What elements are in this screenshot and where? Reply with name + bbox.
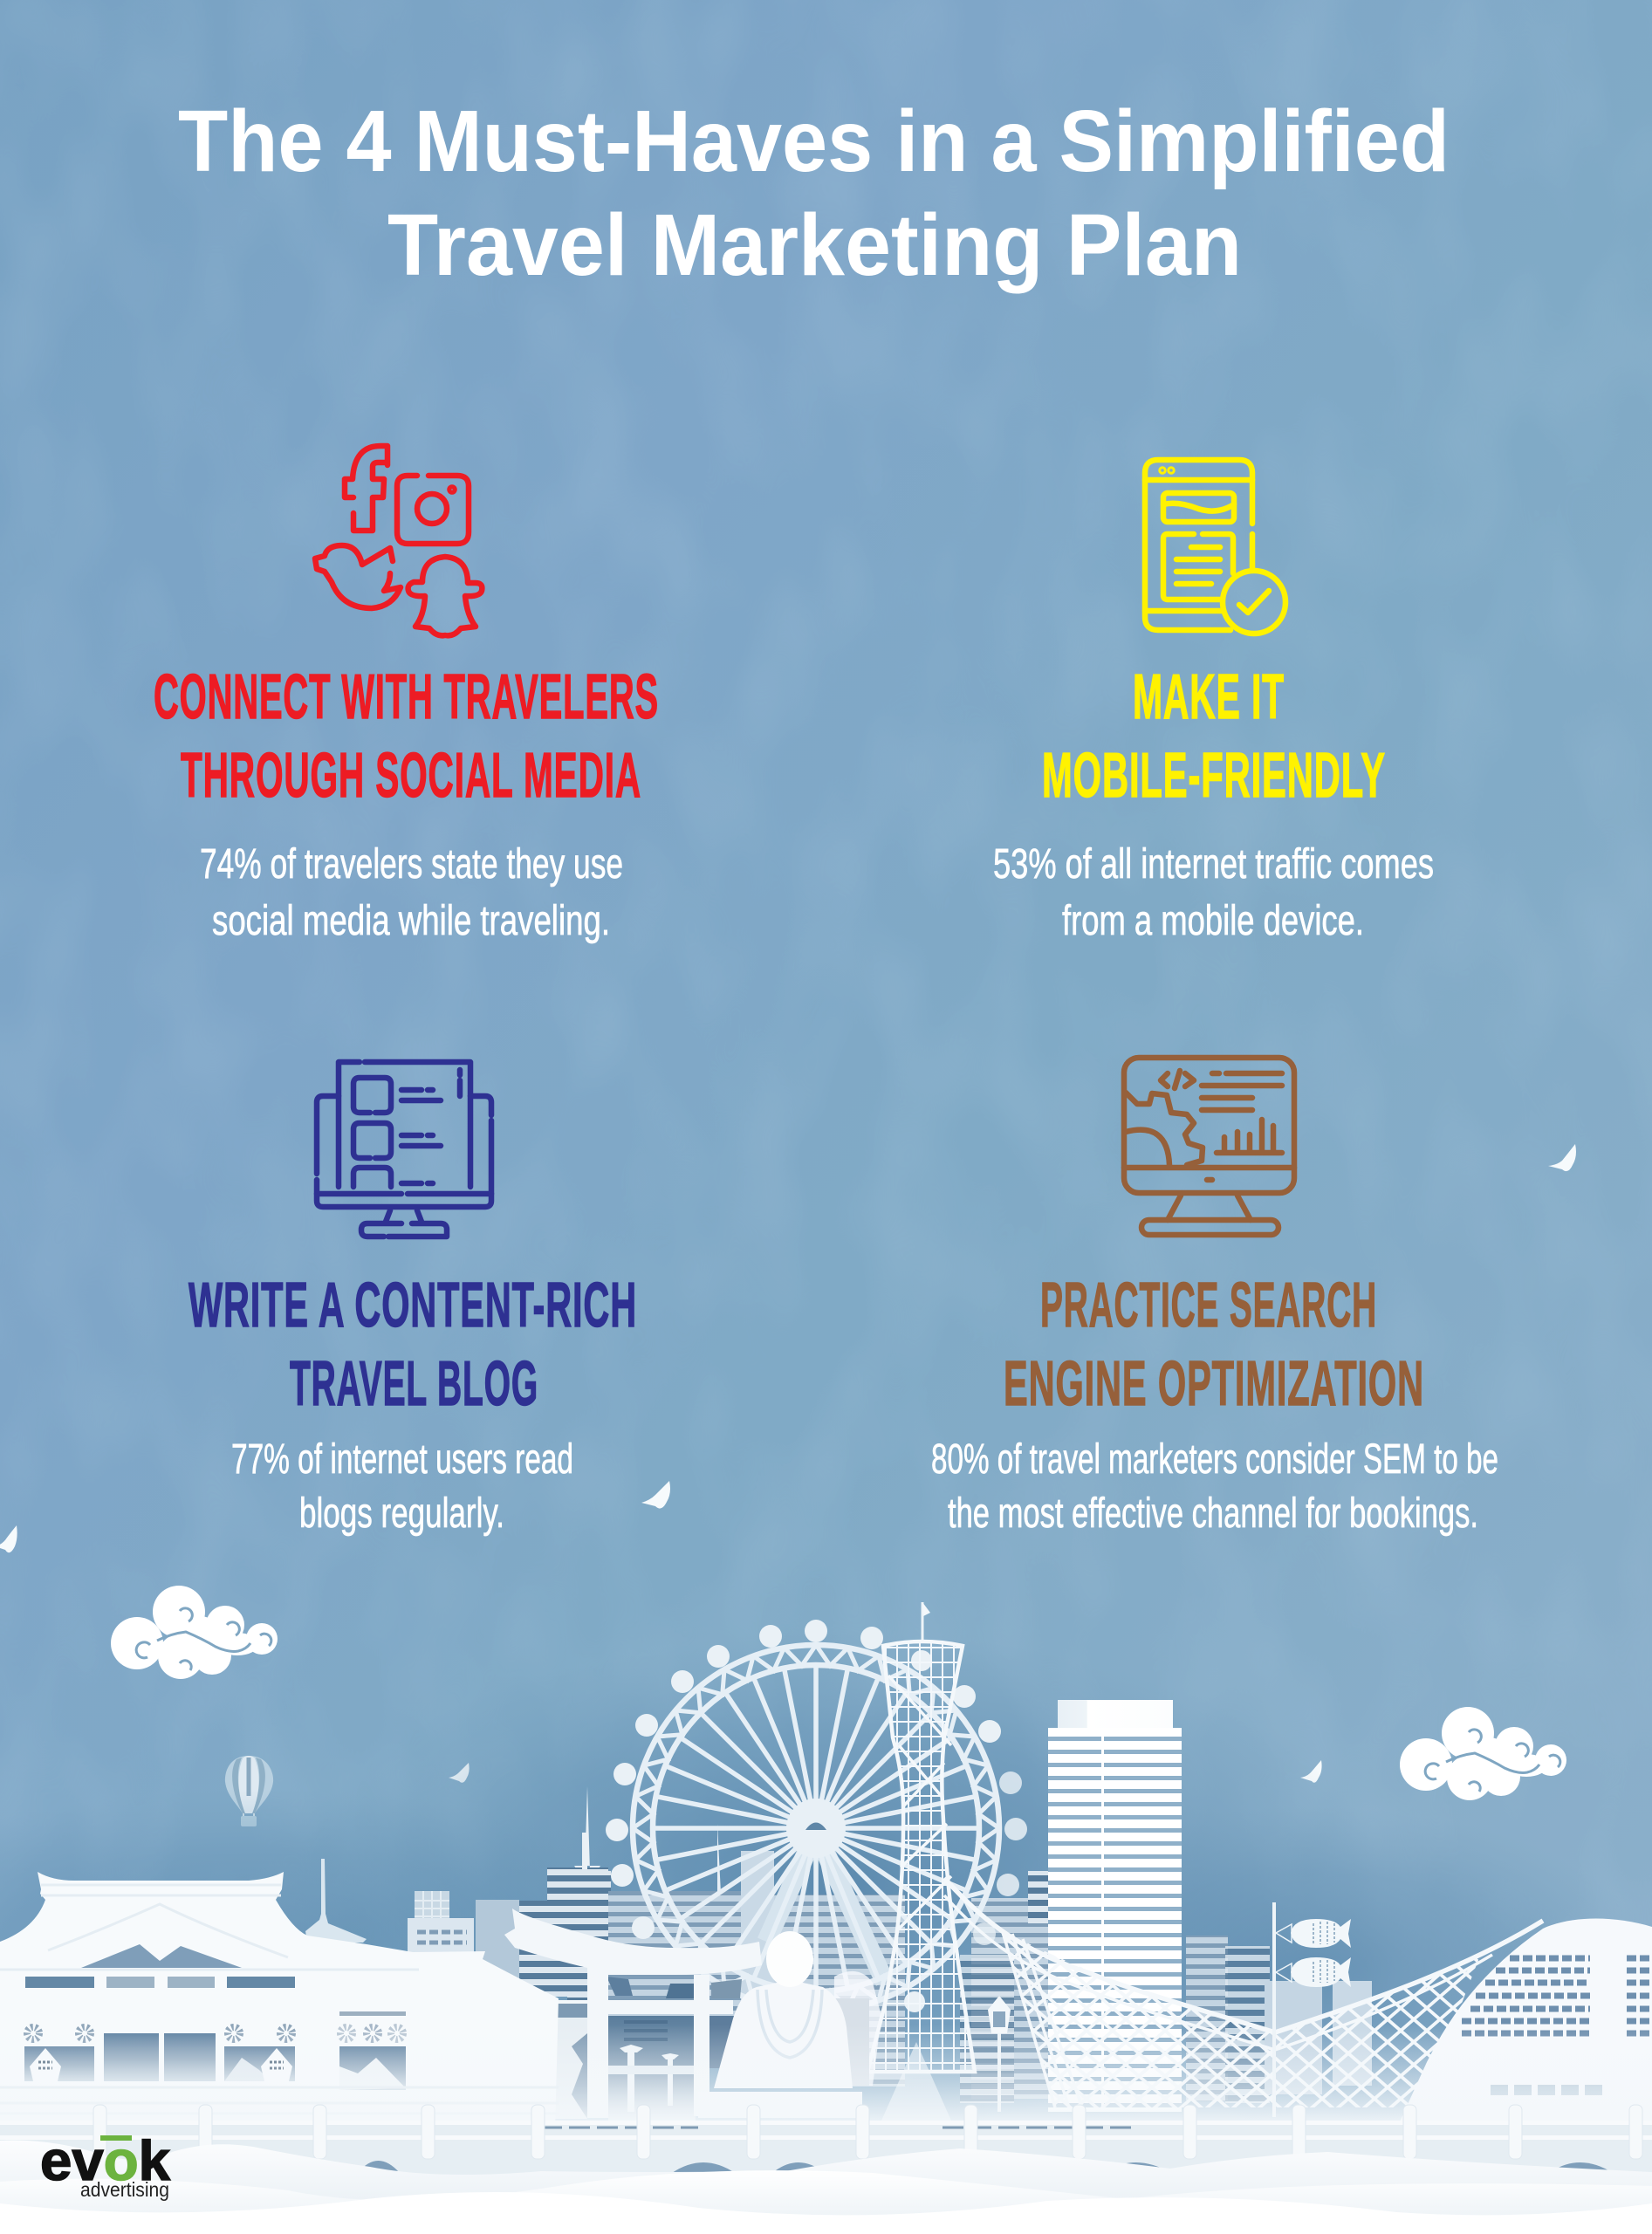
bridge arches xyxy=(358,2161,1613,2173)
lantern and trees right xyxy=(833,1971,1011,2121)
text: mobile stat: from a mobile device. xyxy=(1062,898,1364,944)
icon: SEO monitor with gear and chart xyxy=(1124,1058,1294,1235)
title: Travel Marketing Plan xyxy=(387,196,1242,294)
panel: SEO xyxy=(931,1058,1498,1537)
stone lanterns xyxy=(620,2045,679,2112)
heading: social media: CONNECT WITH TRAVELERS xyxy=(154,662,659,732)
heading: blog xyxy=(189,1271,637,1419)
tall office tower xyxy=(1048,1700,1182,2112)
text: SEO stat xyxy=(931,1436,1498,1537)
dark gaps under beam xyxy=(607,1977,742,1998)
railing posts xyxy=(93,2105,1642,2159)
heading: mobile friendly: MOBILE-FRIENDLY xyxy=(1042,741,1386,811)
temple rosettes xyxy=(27,2027,403,2039)
text: blog stat: blogs regularly. xyxy=(299,1490,504,1537)
maritime museum roof net xyxy=(944,1878,1543,2112)
title xyxy=(178,93,1450,294)
birds xyxy=(0,1144,1576,1783)
pagoda xyxy=(305,1859,367,1943)
logo: evok advertising: evok xyxy=(40,2129,170,2192)
text: social media stat: 74% of travelers state they use xyxy=(200,841,623,887)
dome windows xyxy=(1462,1958,1652,2033)
cloud: right xyxy=(1400,1707,1566,1800)
tree and lantern by the gate xyxy=(483,2000,587,2119)
temple xyxy=(0,1872,559,2129)
torii lintel and pillars xyxy=(504,1908,762,2118)
background city buildings xyxy=(305,1786,1372,2103)
icon: blog on desktop monitor xyxy=(317,1062,491,1237)
heading: mobile friendly xyxy=(1042,662,1386,811)
heading: social media: THROUGH SOCIAL MEDIA xyxy=(181,741,641,811)
roof ledge shading xyxy=(0,1885,419,1970)
hot air balloon xyxy=(225,1756,273,1826)
bridge railing xyxy=(0,2105,1652,2234)
wheel rim xyxy=(630,1642,1002,2014)
heading: blog: WRITE A CONTENT-RICH xyxy=(189,1271,637,1340)
buddha statue xyxy=(698,1931,862,2118)
museum dome xyxy=(1396,1918,1652,2129)
text: social media stat: social media while traveling. xyxy=(212,898,610,944)
wheel hub xyxy=(786,1799,846,1858)
heading: social media xyxy=(154,662,659,811)
cloud: left xyxy=(111,1586,278,1679)
heading: SEO xyxy=(1004,1271,1424,1419)
view under torii xyxy=(608,2016,736,2121)
text: blog stat xyxy=(231,1436,573,1537)
icon: social media logos xyxy=(315,446,482,635)
left distant buildings xyxy=(408,1891,474,1962)
text: social media stat xyxy=(200,841,623,944)
title: The 4 Must-Haves in a Simplified xyxy=(178,93,1450,190)
haze over skyline base xyxy=(0,2025,1652,2129)
koi flags xyxy=(1272,1902,1351,2117)
temple lower windows xyxy=(24,2011,406,2090)
panel: mobile friendly xyxy=(993,460,1434,944)
heading: blog: TRAVEL BLOG xyxy=(290,1349,538,1419)
text: blog stat: 77% of internet users read xyxy=(231,1436,573,1483)
logo: evok advertising: advertising xyxy=(80,2178,169,2201)
temple veranda xyxy=(0,2087,559,2114)
panel: blog xyxy=(189,1062,637,1537)
torii gate xyxy=(504,1908,762,2121)
wheel pods xyxy=(606,1620,1027,2012)
wheel spokes xyxy=(655,1667,977,1990)
paper waves xyxy=(0,2141,1652,2234)
port tower xyxy=(867,1602,975,2072)
ferris wheel xyxy=(606,1620,1027,2014)
temple upper windows xyxy=(25,1977,295,1988)
panel: social media xyxy=(154,446,659,944)
text: mobile stat: 53% of all internet traffic comes xyxy=(993,841,1434,887)
temple gable xyxy=(81,1944,242,1968)
skyline: sky shading xyxy=(0,1632,1652,2138)
temple roof xyxy=(0,1872,559,2129)
heading: SEO: PRACTICE SEARCH xyxy=(1040,1271,1377,1340)
heading: mobile friendly: MAKE IT xyxy=(1133,662,1285,732)
temple window lanterns xyxy=(30,2048,292,2081)
icon: mobile page with check xyxy=(1145,460,1285,634)
text: mobile stat xyxy=(993,841,1434,944)
wheel legs xyxy=(766,1841,885,1982)
